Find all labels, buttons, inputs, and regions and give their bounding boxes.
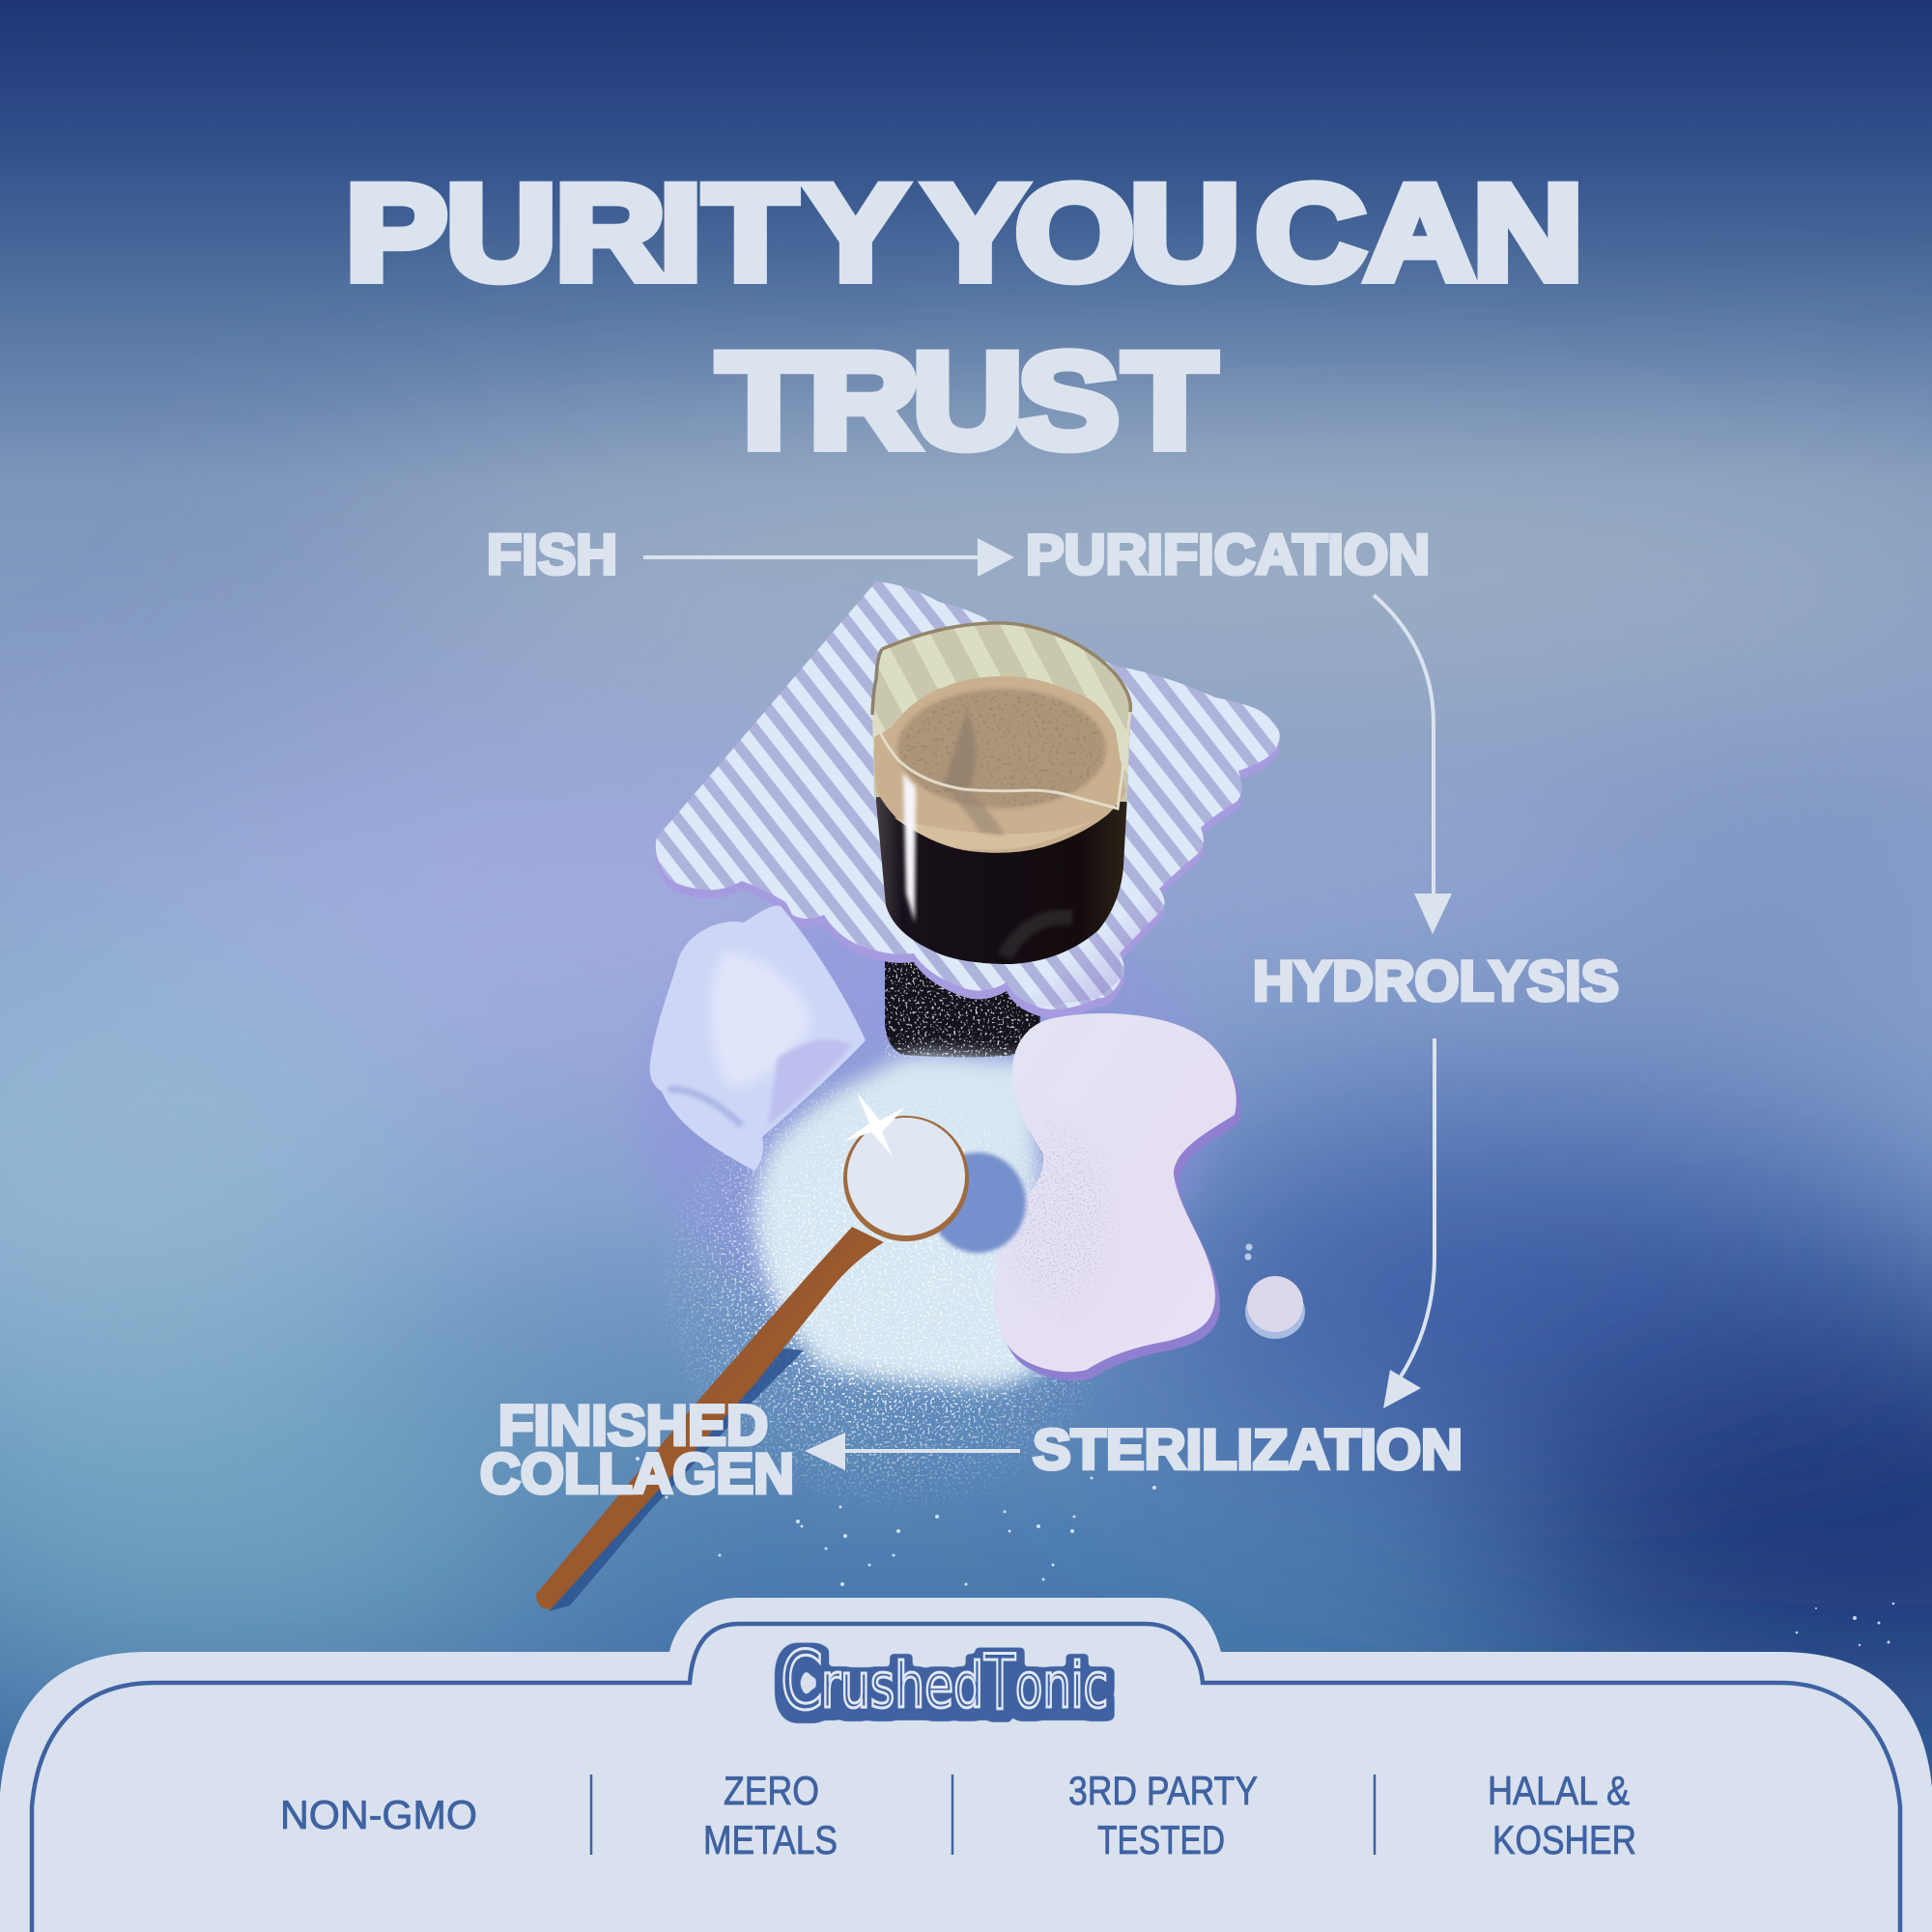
panel inner outline bbox=[32, 1624, 1900, 1932]
photo: product still life bbox=[536, 582, 1305, 1642]
logo: Crushed Tonic: T bbox=[983, 1640, 1015, 1727]
badge: Non-GMO: NON-GMO bbox=[280, 1792, 477, 1837]
tablet and droplets bbox=[1244, 1244, 1305, 1339]
bottom panel bbox=[0, 1598, 1932, 1932]
title bbox=[346, 156, 1583, 476]
step: FINISHED COLLAGEN: FINISHED bbox=[498, 1395, 768, 1457]
divider lines bbox=[591, 1775, 1375, 1855]
sparkle star bbox=[843, 1093, 905, 1156]
step: FINISHED COLLAGEN: COLLAGEN bbox=[480, 1443, 794, 1505]
badge: Zero Metals: METALS bbox=[703, 1817, 838, 1862]
logo: Crushed Tonic bbox=[781, 1634, 1108, 1728]
arrow: fish to purification bbox=[643, 538, 1014, 577]
beaker reflection bbox=[885, 956, 1043, 1058]
logo: Crushed Tonic: rushed bbox=[821, 1651, 983, 1722]
powder pile bbox=[661, 1039, 1108, 1510]
scattered powder specks bbox=[636, 1457, 1156, 1586]
arrow: sterilization to finished collagen bbox=[805, 1433, 1020, 1470]
spoon shadow bbox=[549, 1152, 1026, 1611]
step: FINISHED COLLAGEN bbox=[480, 1395, 794, 1505]
step: FISH: FISH bbox=[487, 524, 617, 586]
arrow: hydrolysis to sterilization bbox=[1383, 1038, 1435, 1408]
arrow: purification to hydrolysis bbox=[1374, 595, 1452, 934]
title: PURITY YOU CAN bbox=[346, 156, 1583, 308]
glass rim bbox=[872, 712, 1130, 809]
badge: 3rd Party Tested bbox=[1068, 1768, 1258, 1862]
logo: Crushed Tonic: C bbox=[781, 1634, 823, 1728]
step: HYDROLYSIS: HYDROLYSIS bbox=[1253, 951, 1619, 1012]
glass highlight bbox=[903, 773, 916, 923]
step: PURIFICATION: PURIFICATION bbox=[1026, 524, 1430, 586]
surface glow bbox=[638, 889, 1217, 1333]
napkin: striped scalloped cloth bbox=[656, 582, 1280, 1018]
whipped cream collagen bbox=[650, 905, 866, 1171]
foam bbox=[874, 676, 1125, 853]
badge: 3rd Party Tested: 3RD PARTY bbox=[1068, 1768, 1258, 1813]
badge: Zero Metals bbox=[703, 1768, 838, 1862]
scattered sparkles bottom right bbox=[1796, 1603, 1894, 1646]
badge: Halal and Kosher bbox=[1488, 1768, 1636, 1862]
spoon with powder bbox=[536, 1095, 989, 1609]
beaker of dark liquid bbox=[872, 623, 1130, 964]
badge: Zero Metals: ZERO bbox=[724, 1768, 819, 1813]
badge: 3rd Party Tested: TESTED bbox=[1097, 1817, 1225, 1862]
badge: Halal and Kosher: KOSHER bbox=[1492, 1817, 1636, 1862]
logo: Crushed Tonic: onic bbox=[1015, 1651, 1108, 1722]
badge: Halal and Kosher: HALAL & bbox=[1488, 1768, 1630, 1813]
glass upper wall bbox=[872, 623, 1130, 802]
milk spill bbox=[985, 1013, 1241, 1380]
title: TRUST bbox=[718, 325, 1216, 476]
step: STERILIZATION: STERILIZATION bbox=[1033, 1418, 1463, 1482]
